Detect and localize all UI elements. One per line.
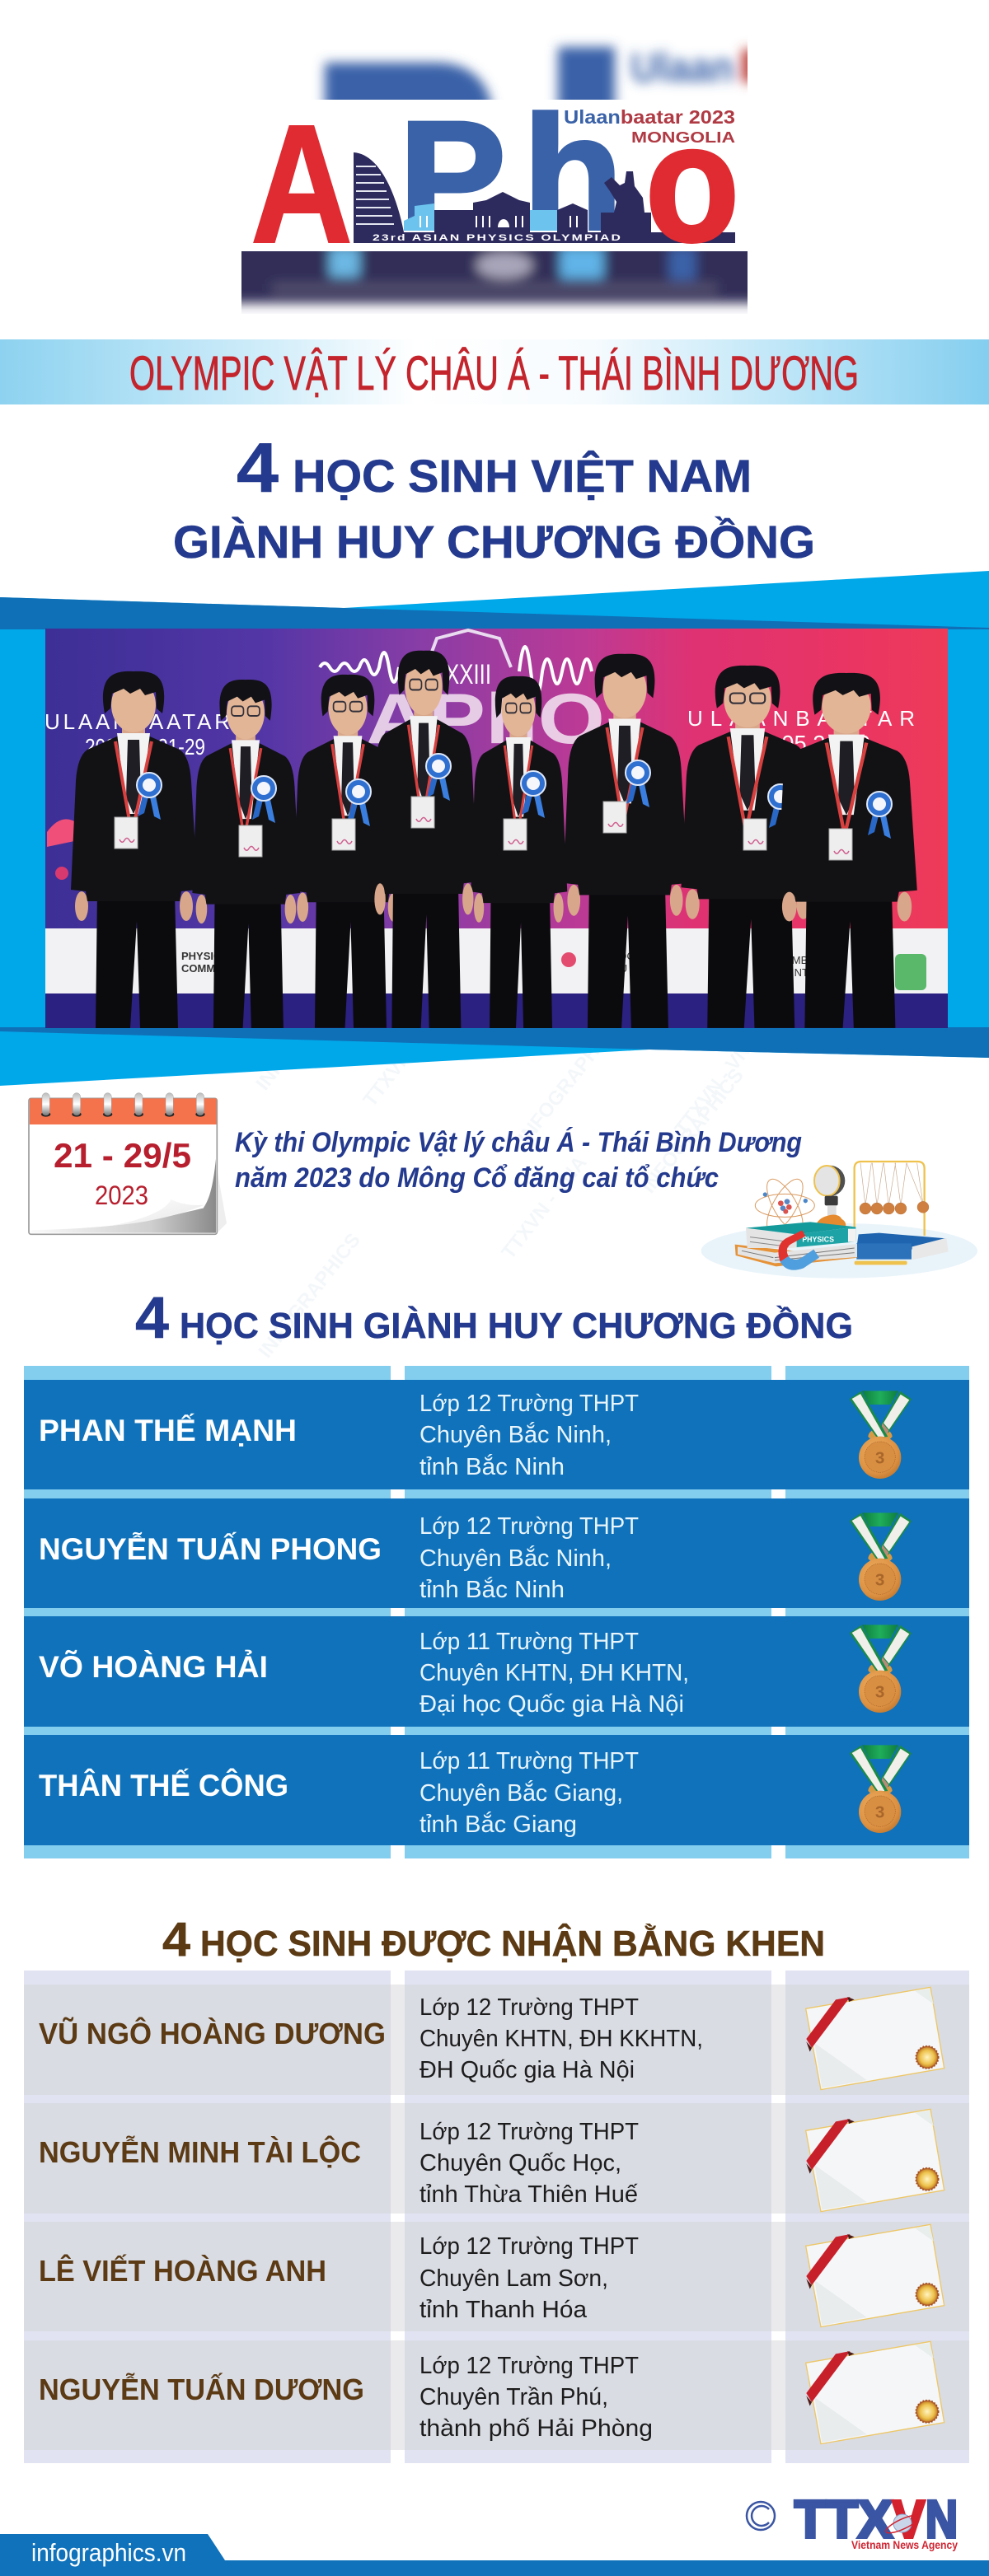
heading: certificates [162,1913,825,1966]
row: Thân Thế Công: Lớp 11 Trường THPT [420,1748,639,1774]
table: certificate recipients background [24,1971,969,2463]
logo place line: Ulaan baatar 2023 [564,106,735,128]
row: Phan Thế Mạnh: PHAN THẾ MẠNH [39,1414,297,1447]
watermarks: TTXVN - VNA [359,999,452,1111]
icon: bronze medal [850,1391,912,1479]
agency letters: V [893,2490,925,2549]
main title: 4 [237,429,279,507]
logo letter P: P [399,89,506,262]
teal book [746,1222,855,1248]
light blue blocks [404,203,557,231]
row: Lê Viết Hoàng Anh: Chuyên Lam Sơn, [420,2265,608,2292]
row: Phan Thế Mạnh [39,1391,912,1480]
agency name: Vietnam News Agency [851,2538,958,2551]
row: Lê Viết Hoàng Anh: LÊ VIẾT HOÀNG ANH [39,2253,326,2288]
magnet [778,1230,805,1262]
row: Thân Thế Công: THÂN THẾ CÔNG [39,1768,288,1802]
logo: blurred background bottom [241,251,748,313]
student 6 [564,654,687,1028]
student 3 [297,674,393,1028]
sponsor strip [45,928,948,993]
logo letter o: o [645,90,739,277]
row: Nguyễn Tuấn Dương: thành phố Hải Phòng [420,2415,653,2442]
row: Lê Viết Hoàng Anh: Lớp 12 Trường THPT [420,2233,639,2260]
heading: certificates: 4 [162,1913,190,1966]
tower stripes [356,166,394,224]
row: Nguyễn Tuấn Dương: Lớp 12 Trường THPT [420,2353,639,2379]
row: Thân Thế Công [39,1745,912,1838]
backdrop decorations: ULAANBAATAR [687,706,915,731]
atom [755,1174,814,1237]
row: Lê Viết Hoàng Anh: tỉnh Thanh Hóa [420,2297,588,2323]
icon: bronze medal: 3 [875,1449,884,1468]
agency letters [794,2490,958,2549]
table: bronze medal winners background [24,1366,969,1858]
student 1 [71,671,198,1028]
backdrop decorations: YOMBO [776,954,816,966]
row: Nguyễn Tuấn Phong: tỉnh Bắc Ninh [420,1576,565,1603]
backdrop decorations: COMMITTEE [181,962,246,975]
backdrop decorations: OYU [604,962,627,975]
student 2 [192,680,300,1028]
row: Phan Thế Mạnh: Chuyên Bắc Ninh, [420,1421,612,1448]
icon: bronze medal: 3 [875,1571,884,1590]
logo: blurred background top [315,37,748,100]
watermarks: INFOGRAPHICS [513,1015,625,1148]
row: Võ Hoàng Hải: Lớp 11 Trường THPT [420,1629,639,1655]
row: Võ Hoàng Hải: VÕ HOÀNG HẢI [39,1649,268,1684]
backdrop decorations: M [664,836,687,867]
book label: PHYSICS [802,1235,834,1243]
student 4 [371,651,478,1028]
row: Vũ Ngô Hoàng Dương: Lớp 12 Trường THPT [420,1994,639,2021]
row: Lê Viết Hoàng Anh [39,2224,944,2327]
logo country: MONGOLIA [631,129,735,146]
heading: bronze medals [135,1286,853,1351]
backdrop decorations: 2023.05.21-29 [85,734,205,760]
row: Nguyễn Tuấn Dương [39,2341,944,2444]
intro text: năm 2023 do Mông Cổ đăng cai tổ chức [235,1162,719,1194]
skyline [354,152,735,243]
light bulb [814,1166,845,1196]
backdrop decorations: ULAANBAATAR [45,709,230,734]
row: Vũ Ngô Hoàng Dương [39,1987,944,2090]
shadow ellipse [701,1223,977,1279]
icon: bronze medal [850,1745,912,1833]
row: Võ Hoàng Hải: Chuyên KHTN, ĐH KHTN, [420,1660,689,1686]
intro text [235,1127,802,1194]
icon: calendar [29,1093,227,1234]
backdrop decorations: XXIII [445,659,491,690]
backdrop decorations: 2023.05.21-29 [725,731,870,756]
row: Vũ Ngô Hoàng Dương: Chuyên KHTN, ĐH KKHTN, [420,2026,703,2052]
row: Nguyễn Minh Tài Lộc: Chuyên Quốc Học, [420,2150,621,2176]
heading: certificates: HỌC SINH ĐƯỢC NHẬN BẰNG KHEN [200,1923,825,1964]
row: Phan Thế Mạnh: Lớp 12 Trường THPT [420,1391,639,1417]
agency letters: N [926,2490,958,2549]
globe [884,2512,921,2536]
backdrop decorations: APhO [366,680,605,759]
newton cradle [855,1162,925,1238]
main title: GIÀNH HUY CHƯƠNG ĐỒNG [173,516,815,568]
watermarks: INFOGRAPHICS [254,1229,365,1363]
watermarks: INFOGRAPHICS [637,1064,748,1198]
icon: bronze medal: 3 [875,1803,884,1822]
backdrop decorations: PHYSICS [181,950,228,962]
icon: bronze medal [850,1625,912,1713]
row: Võ Hoàng Hải: Đại học Quốc gia Hà Nội [420,1691,684,1718]
heading: bronze medals: 4 [135,1286,170,1351]
row: Thân Thế Công: Chuyên Bắc Giang, [420,1779,623,1807]
icon: certificate [806,2341,944,2444]
watermarks: TTXVN - VNA [670,1028,764,1140]
photo frame [0,571,989,1086]
icon: certificate [806,2224,944,2327]
palace columns [420,216,577,227]
icon: physics illustration [701,1162,977,1279]
icon: certificate [806,2109,944,2212]
icon: bronze medal: 3 [875,1683,884,1702]
row: Nguyễn Tuấn Dương: Chuyên Trần Phú, [420,2384,608,2410]
logo tagline: 23rd ASIAN PHYSICS OLYMPIAD [373,233,622,243]
main title: HỌC SINH VIỆT NAM [293,450,752,502]
stage backdrop [45,629,948,933]
blue book [857,1233,946,1250]
row: Vũ Ngô Hoàng Dương: VŨ NGÔ HOÀNG DƯƠNG [39,2016,386,2050]
watermarks [251,961,764,1363]
logo letter h: h [523,82,623,264]
main title [173,429,815,568]
row: Phan Thế Mạnh: tỉnh Bắc Ninh [420,1453,565,1480]
row: Nguyễn Minh Tài Lộc: NGUYỄN MINH TÀI LỘC [39,2134,361,2169]
logo: blurred background top: Ulaan [630,44,734,91]
heading: bronze medals: HỌC SINH GIÀNH HUY CHƯƠNG ĐỒNG [180,1305,853,1346]
logo letter A: A [251,90,353,278]
icon: bronze medal [850,1512,912,1601]
footer bar [0,2534,989,2576]
row: Nguyễn Minh Tài Lộc: Lớp 12 Trường THPT [420,2119,639,2145]
watermarks: TTXVN - VNA [497,1152,591,1264]
student 8 [777,673,917,1028]
row: Nguyễn Minh Tài Lộc [39,2109,944,2212]
row: Thân Thế Công: tỉnh Bắc Giang [420,1811,577,1838]
row: Võ Hoàng Hải [39,1625,912,1718]
row: Vũ Ngô Hoàng Dương: ĐH Quốc gia Hà Nội [420,2057,635,2083]
row: Nguyễn Tuấn Phong [39,1512,912,1603]
bottom orange book [735,1245,859,1266]
icon: certificate [806,1987,944,2090]
backdrop decorations [45,630,926,990]
team photo [45,629,948,1028]
row: Nguyễn Tuấn Dương: NGUYỄN TUẤN DƯƠNG [39,2372,364,2406]
backdrop decorations: ERDO [604,950,635,962]
backdrop decorations: PRINTING [776,966,827,979]
row: Nguyễn Tuấn Phong: NGUYỄN TUẤN PHONG [39,1531,382,1566]
student 7 [681,666,816,1028]
row: Nguyễn Minh Tài Lộc: tỉnh Thừa Thiên Huế [420,2181,638,2208]
logo: TTXVN [747,2490,958,2551]
row: Nguyễn Tuấn Phong: Lớp 12 Trường THPT [420,1513,639,1540]
watermarks: INFOGRAPHICS [251,961,363,1095]
horse statue [604,171,644,213]
intro text: Kỳ thi Olympic Vật lý châu Á - Thái Bình Dương [235,1127,802,1158]
APhO logo [251,82,739,278]
calendar year: 2023 [95,1180,148,1210]
footer site name: infographics.vn [31,2538,186,2567]
floor [45,993,948,1028]
student 5 [471,676,567,1028]
copyright mark [747,2502,775,2530]
agency letters: TTX [794,2490,893,2549]
row: Nguyễn Tuấn Phong: Chuyên Bắc Ninh, [420,1545,612,1572]
calendar date: 21 - 29/5 [54,1136,191,1175]
